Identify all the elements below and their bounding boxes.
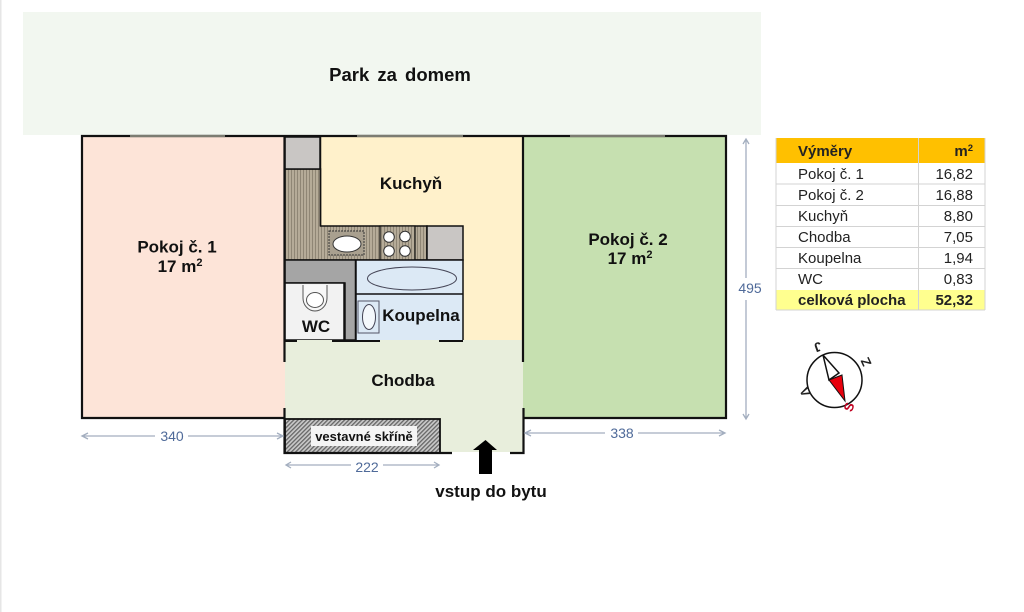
table rows [798, 166, 973, 288]
table header: 2 [968, 143, 973, 154]
room: WC [285, 283, 344, 340]
icon: compass: Z [858, 355, 874, 369]
room: Chodba: Chodba [371, 371, 435, 390]
table rows: Pokoj č. 1 [798, 166, 864, 183]
room: Chodba [285, 340, 523, 452]
icon: compass [796, 339, 874, 414]
room: Koupelna: Koupelna [382, 306, 460, 325]
arrow: entrance [473, 440, 497, 474]
built-in wardrobe [285, 419, 440, 453]
table rows: 1,94 [944, 250, 973, 267]
installation shaft [285, 260, 356, 340]
table header [776, 138, 985, 163]
icon: basin [358, 301, 379, 333]
room: Pokoj č. 1: Pokoj č. 1 [137, 238, 217, 256]
icon: compass: J [812, 339, 824, 355]
panel: park: Park za domem [329, 64, 471, 85]
table rows: 8,80 [944, 208, 973, 225]
kitchen counter [285, 137, 463, 260]
table header: Výměry [798, 143, 853, 160]
table rows: Koupelna [798, 250, 862, 267]
table rows: Chodba [798, 229, 851, 246]
icon: toilet [303, 285, 327, 311]
table rows: Kuchyň [798, 208, 848, 225]
panel: park [23, 12, 761, 135]
entrance label: vstup do bytu [435, 482, 547, 501]
icon: bathtub [368, 267, 456, 290]
table rows: 0,83 [944, 271, 973, 288]
table total row: celková plocha [798, 292, 906, 309]
room: Pokoj č. 2: 2 [646, 249, 652, 261]
icon: compass: S [840, 400, 858, 414]
walls [82, 136, 726, 453]
table rows: Pokoj č. 2 [798, 187, 864, 204]
table: areas [776, 138, 985, 310]
table total row [776, 290, 985, 310]
room: Pokoj č. 2: 17 m [608, 249, 646, 268]
windows [130, 135, 665, 137]
table rows: WC [798, 271, 823, 288]
table rows: 16,88 [935, 187, 973, 204]
dimension: 222: 222 [355, 459, 379, 475]
room: Pokoj č. 2: Pokoj č. 2 [588, 230, 668, 249]
dimension: 495: 495 [738, 280, 762, 296]
icon: compass: V [796, 385, 814, 399]
kitchen sink [329, 231, 364, 255]
table header: m [954, 143, 968, 160]
room: Kuchyň [285, 136, 523, 341]
room: Pokoj č. 1 [82, 136, 285, 418]
stove [380, 226, 415, 260]
table rows: 7,05 [944, 229, 973, 246]
room: Pokoj č. 2 [523, 136, 726, 418]
built-in wardrobe: vestavné skříně [315, 429, 413, 444]
dimension: 495 [738, 139, 762, 419]
room: Koupelna [356, 260, 463, 341]
room: Pokoj č. 1: 2 [196, 257, 202, 269]
table total row: 52,32 [935, 292, 973, 309]
table rows: 16,82 [935, 166, 973, 183]
dimension: 340: 340 [160, 428, 184, 444]
dimension: 340 [82, 428, 283, 444]
dimension: 338 [525, 425, 725, 441]
dimension: 222 [286, 459, 439, 475]
dimension: 338: 338 [610, 425, 634, 441]
room: Pokoj č. 1: 17 m [158, 257, 196, 276]
room: WC: WC [302, 317, 330, 336]
room: Kuchyň: Kuchyň [380, 174, 442, 193]
